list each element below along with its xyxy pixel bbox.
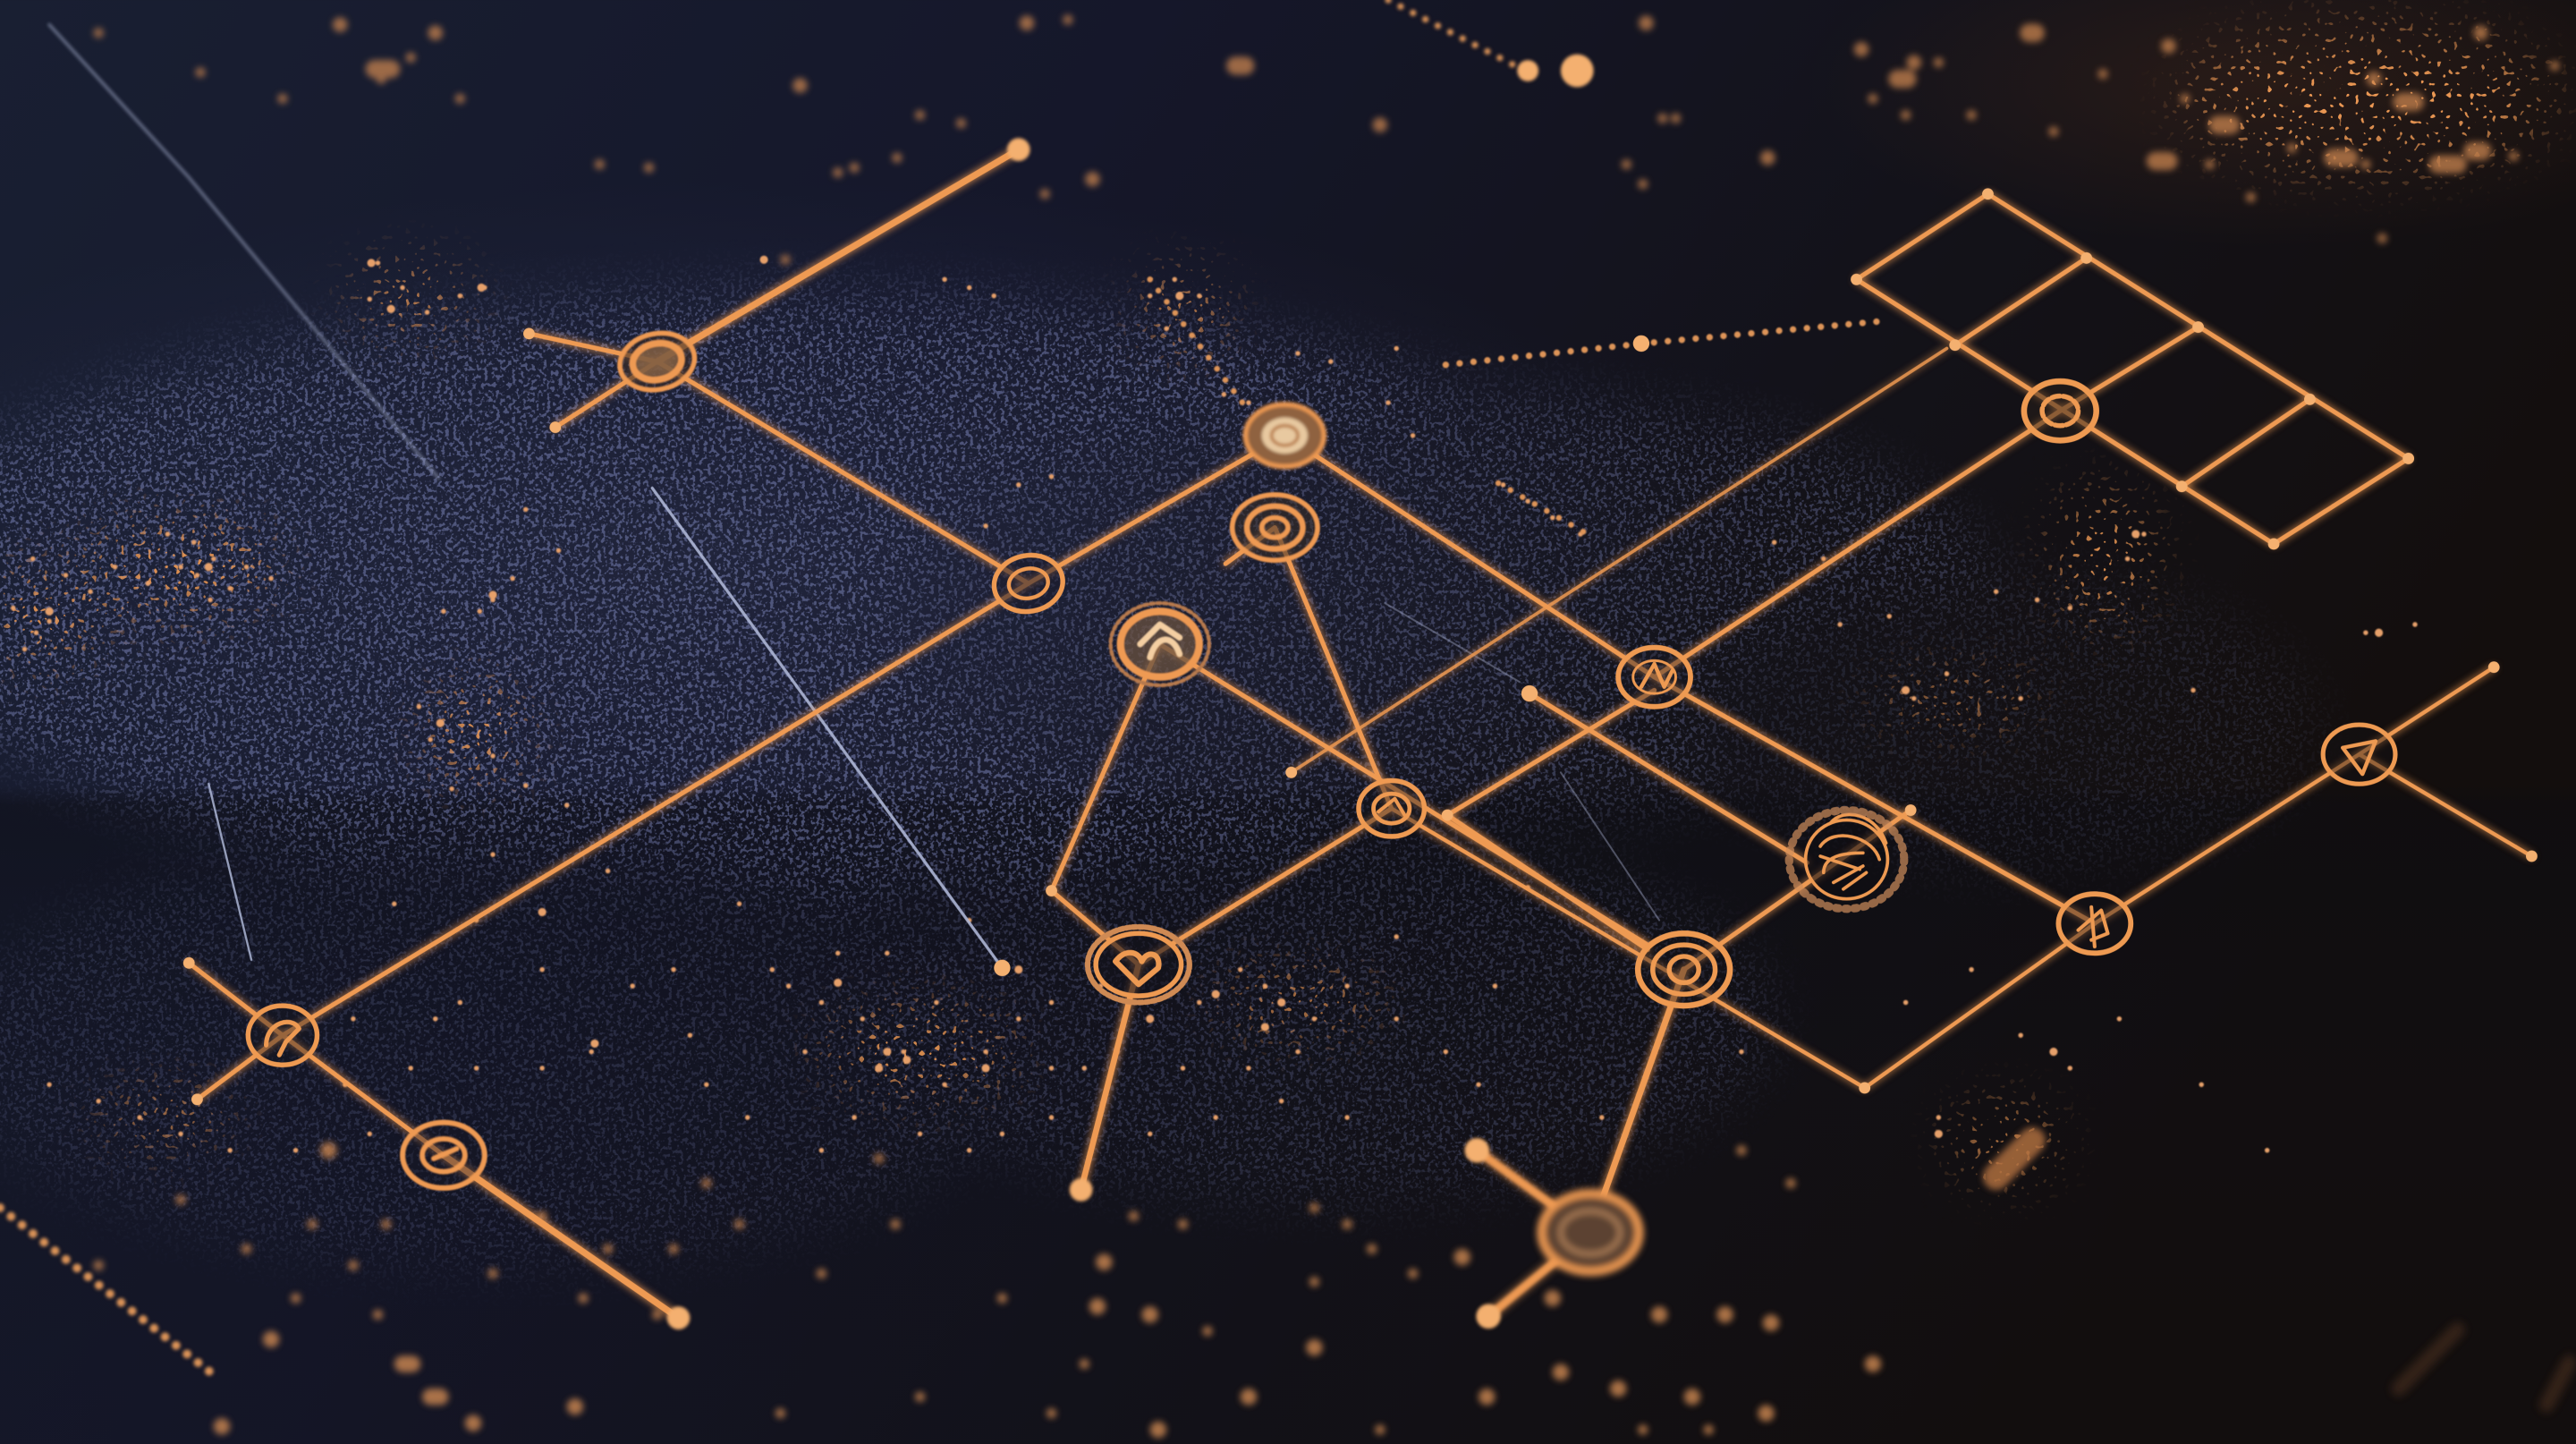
node: ring junction bbox=[989, 550, 1067, 617]
node: far right diamond bbox=[2323, 725, 2395, 784]
node: bottom blurred hub bbox=[1541, 1193, 1640, 1272]
node: heart emblem centre bbox=[1088, 927, 1190, 1002]
node: centre junction bbox=[1359, 780, 1424, 837]
node: lower ring bbox=[1638, 933, 1730, 1006]
connector lines bbox=[189, 149, 2531, 1318]
crisp small particles bbox=[13, 259, 2415, 1151]
node: speckled emblem bbox=[1111, 603, 1209, 685]
streak: lower left bbox=[208, 784, 251, 960]
node: lattice junction bbox=[2024, 381, 2097, 440]
node: right upper bbox=[1618, 648, 1690, 707]
soft far particles bbox=[98, 20, 2555, 259]
streak: faint right bbox=[1385, 603, 1659, 921]
near blurred particles bbox=[98, 1141, 2570, 1430]
node: top left bbox=[614, 327, 700, 396]
node: lower left emblem bbox=[248, 1006, 317, 1065]
copper network bbox=[189, 149, 2531, 1318]
crisp endpoints bbox=[189, 194, 2531, 1100]
streak: top left bbox=[49, 25, 438, 479]
lattice top right bbox=[1857, 194, 2409, 544]
white light streaks bbox=[49, 25, 1659, 968]
node: heart seal with caption ring bbox=[1789, 811, 1904, 909]
blurred endpoints bbox=[679, 71, 1577, 1318]
node: upper emblem bbox=[1233, 495, 1318, 560]
node: top hub bbox=[1245, 404, 1324, 467]
node: right ring bbox=[2058, 894, 2131, 953]
node: lower left ring bbox=[402, 1123, 485, 1188]
dotted chains bbox=[0, 0, 1889, 1372]
end point dots bbox=[189, 71, 2531, 1318]
streak: centre bbox=[652, 488, 1002, 968]
